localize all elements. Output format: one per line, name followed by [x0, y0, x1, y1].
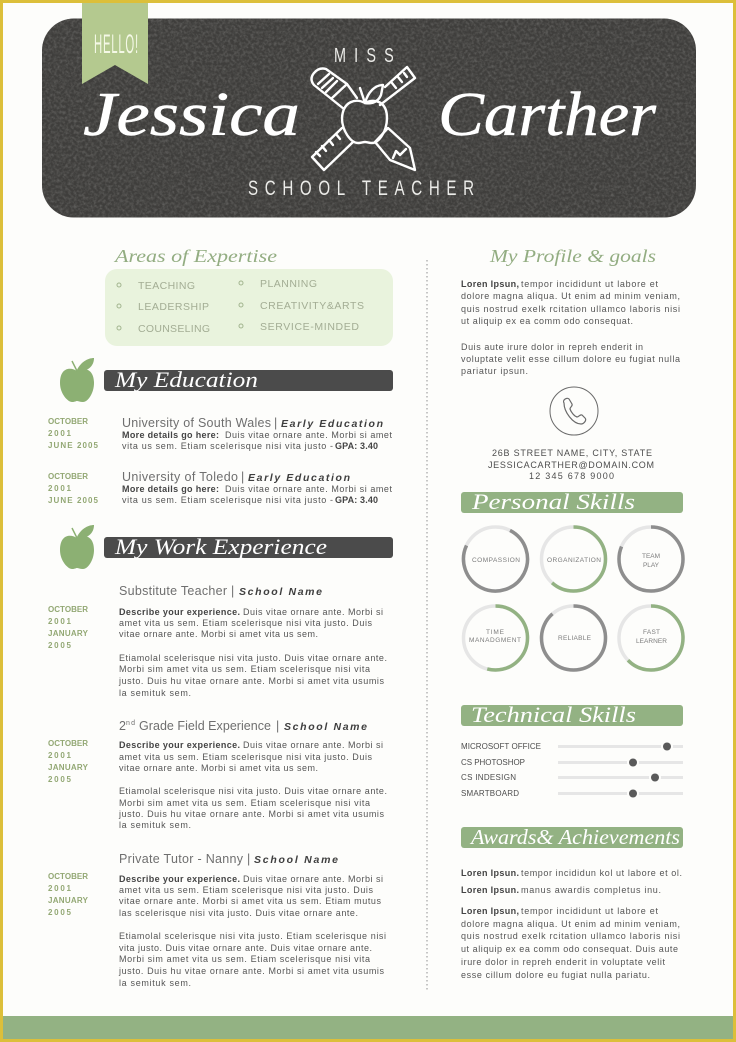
awards text: manus awardis completus inu. — [521, 885, 661, 895]
job 3: Describe your experience. — [119, 874, 240, 884]
contact details: 26B STREET NAME, CITY, STATE — [492, 448, 652, 458]
contact details: JESSICACARTHER@DOMAIN.COM — [488, 460, 654, 470]
heading bar: personal skills: Personal Skills — [471, 489, 635, 514]
skill: cs photoshop: CS PHOTOSHOP — [461, 758, 525, 767]
panel: technical skills — [461, 702, 683, 800]
miss label: MISS — [334, 44, 394, 67]
awards text: quis nostrud exelk rcitation ullamco laboris nisi — [461, 931, 680, 941]
contact details — [488, 448, 654, 481]
awards text: ut aliquip ex ea comm odo consequat. Duis aute — [461, 944, 678, 954]
job 2: justo. Duis hu vitae ornare ante. Morbi si amet vita usumis — [118, 809, 384, 819]
education entry 1: More details go here: — [122, 430, 219, 440]
education entry 2: | — [241, 470, 244, 484]
hello ribbon: HELLO! — [94, 30, 138, 60]
vertical divider — [426, 260, 428, 992]
heading bar: technical skills: Technical Skills — [471, 702, 636, 727]
job 3: 2005 — [48, 908, 72, 917]
job 1: 2005 — [48, 641, 72, 650]
expertise box — [105, 269, 393, 346]
awards text: Loren Ipsun, — [461, 906, 519, 916]
job 1 — [48, 584, 387, 698]
heading: areas of expertise: Areas of Expertise — [114, 246, 277, 266]
ring: fast learner: FAST — [643, 629, 660, 636]
job 3: Duis vitae ornare ante. Morbi si — [243, 874, 383, 884]
job 3: | — [247, 852, 250, 866]
job 1: Morbi sim amet vita us sem. Etiam scelerisque nisi vita — [119, 664, 370, 674]
job 3: OCTOBER — [48, 872, 88, 881]
job 2: 2 — [119, 719, 126, 733]
education entry 2: vita us sem. Etiam scelerisque nisi vita justo - — [122, 495, 333, 505]
job 2: amet vita us sem. Etiam scelerisque nisi vita justo. Duis — [119, 752, 372, 762]
education entry 2: Duis vitae ornare ante. Morbi si amet — [225, 484, 392, 494]
job 2: Etiamolal scelerisque nisi vita justo. Duis vitae ornare ante. — [119, 786, 387, 796]
skill: microsoft office — [461, 740, 683, 752]
job 2: vitae ornare ante. Morbi si amet vita us sem. — [119, 763, 318, 773]
job 2: Morbi sim amet vita us sem. Etiam scelerisque nisi vita — [119, 798, 370, 808]
education entry 2: 2001 — [48, 484, 72, 493]
icon: apple — [60, 525, 94, 569]
expertise list: COUNSELING — [138, 323, 210, 335]
profile text: voluptate velit esse cillum dolore eu fugiat nulla — [461, 354, 680, 364]
job 1: justo. Duis hu vitae ornare ante. Morbi si amet vita usumis — [118, 676, 384, 686]
awards text: tempor incididunt ut labore et — [521, 906, 658, 916]
awards text — [461, 868, 682, 980]
job 1: vitae ornare ante. Morbi si amet vita us sem. — [119, 629, 318, 639]
profile text: dolore magna aliqua. Ut enim ad minim veniam, — [461, 291, 680, 301]
expertise list: PLANNING — [260, 278, 317, 290]
skill: smartboard — [461, 788, 683, 800]
education entry 1: vita us sem. Etiam scelerisque nisi vita justo - — [122, 441, 333, 451]
job 1: School Name — [239, 586, 322, 598]
job 1: 2001 — [48, 617, 72, 626]
ring: fast learner: LEARNER — [636, 638, 667, 645]
heading bar: technical skills — [461, 702, 683, 727]
heading bar: awards and achievements: Awards& Achievements — [469, 825, 680, 849]
profile text: quis nostrud exelk rcitation ullamco laboris nisi — [461, 304, 680, 314]
hello ribbon — [82, 3, 148, 84]
job 2: OCTOBER — [48, 739, 88, 748]
education entry 1: OCTOBER — [48, 417, 88, 426]
education entry 1: University of South Wales — [122, 416, 271, 430]
job 3: JANUARY — [48, 896, 89, 905]
expertise list — [117, 278, 364, 335]
ring: organization — [542, 527, 606, 591]
job title: SCHOOL TEACHER — [248, 175, 474, 200]
awards text: tempor incididun kol ut labore et ol. — [521, 868, 682, 878]
education entry 1: | — [274, 416, 277, 430]
awards text: irure dolor in repreh enderit in voluptate velit — [461, 957, 665, 967]
ring: compassion: COMPASSION — [472, 557, 520, 564]
ring: team play: TEAM — [642, 553, 660, 560]
job 3: School Name — [254, 854, 338, 866]
awards text: esse cillum dolore eu fugiat nulla pariatu. — [461, 970, 650, 980]
ring: time management — [464, 606, 528, 670]
job 2: JANUARY — [48, 763, 89, 772]
icon: phone — [550, 387, 598, 435]
skill: microsoft office: MICROSOFT OFFICE — [461, 742, 541, 751]
profile text: Duis aute irure dolor in repreh enderit in — [461, 342, 643, 352]
job 1: Etiamolal scelerisque nisi vita justo. Duis vitae ornare ante. — [119, 653, 387, 663]
job 1: OCTOBER — [48, 605, 88, 614]
first name: Jessica — [83, 81, 300, 149]
job 1: amet vita us sem. Etiam scelerisque nisi vita justo. Duis — [119, 618, 372, 628]
panel: areas of expertise — [105, 246, 393, 346]
job 2: nd — [126, 720, 135, 727]
panel: personal skills — [452, 489, 683, 670]
job 3: Morbi sim amet vita us sem. Etiam scelerisque nisi vita — [119, 954, 370, 964]
contact details: 12 345 678 9000 — [529, 471, 614, 481]
job 1: | — [231, 584, 234, 598]
profile text — [461, 279, 680, 376]
awards text: Loren Ipsun. — [461, 885, 519, 895]
heading bar: personal skills — [461, 489, 683, 514]
education entry 2: GPA: 3.40 — [335, 495, 378, 505]
panel: education — [48, 358, 393, 505]
profile text: Loren Ipsun, — [461, 279, 519, 289]
ring: time management: MANADGMENT — [469, 637, 521, 644]
profile text: ut aliquip ex ea comm odo consequat. — [461, 316, 633, 326]
job 1: JANUARY — [48, 629, 89, 638]
expertise list: LEADERSHIP — [138, 301, 209, 313]
ring: time management: TIME — [486, 629, 505, 636]
panel: profile — [461, 246, 680, 481]
heading bar: my education: My Education — [114, 367, 258, 392]
heading: my profile and goals: My Profile & goals — [489, 246, 656, 266]
job 3: Etiamolal scelerisque nisi vita justo. Etiam scelerisque nisi — [119, 931, 386, 941]
education entry 1: JUNE 2005 — [48, 441, 99, 450]
education entry 1: Early Education — [281, 418, 383, 430]
job 3: 2001 — [48, 884, 72, 893]
ring: organization: ORGANIZATION — [547, 557, 601, 564]
education entry 1 — [48, 416, 392, 451]
ring: compassion — [452, 516, 539, 602]
icon: apple — [60, 358, 94, 402]
job 2: Duis vitae ornare ante. Morbi si — [243, 740, 383, 750]
panel: work experience — [48, 525, 393, 988]
skill: cs indesign: CS INDESIGN — [461, 773, 516, 782]
job 2: | — [276, 719, 279, 733]
skill: cs photoshop — [461, 756, 683, 768]
ring: team play: PLAY — [643, 562, 660, 569]
job 1: Describe your experience. — [119, 607, 240, 617]
expertise list: CREATIVITY&ARTS — [260, 300, 364, 312]
job 3: la semituk sem. — [119, 978, 191, 988]
job 1: Substitute Teacher — [119, 584, 227, 598]
job 3: justo. Duis hu vitae ornare ante. Morbi si amet vita usumis — [118, 966, 384, 976]
icon: pencil ruler and apple — [312, 67, 415, 170]
skill: cs indesign — [461, 772, 683, 784]
job 3 — [48, 852, 386, 988]
job 2: Describe your experience. — [119, 740, 240, 750]
expertise list: SERVICE-MINDED — [260, 321, 359, 333]
job 2: la semituk sem. — [119, 820, 191, 830]
job 1: Duis vitae ornare ante. Morbi si — [243, 607, 383, 617]
education entry 1: GPA: 3.40 — [335, 441, 378, 451]
profile text: pariatur ipsun. — [461, 366, 528, 376]
job 2: 2001 — [48, 751, 72, 760]
job 2 — [48, 719, 387, 830]
ring: team play — [619, 527, 683, 591]
header chalkboard banner — [42, 18, 696, 218]
heading bar: my work experience: My Work Experience — [114, 534, 327, 559]
awards text: dolore magna aliqua. Ut enim ad minim veniam, — [461, 919, 680, 929]
education entry 2: University of Toledo — [122, 470, 238, 484]
awards text: Loren Ipsun. — [461, 868, 519, 878]
last name: Carther — [438, 81, 657, 149]
job 2: Grade Field Experience — [139, 719, 271, 733]
job 2: School Name — [284, 721, 367, 733]
education entry 2: OCTOBER — [48, 472, 88, 481]
job 3: vitae ornare ante. Morbi si amet vita us sem. Etiam mutus — [119, 896, 381, 906]
education entry 1: Duis vitae ornare ante. Morbi si amet — [225, 430, 392, 440]
education entry 2: More details go here: — [122, 484, 219, 494]
ring: fast learner — [619, 606, 683, 670]
skill: smartboard: SMARTBOARD — [461, 789, 519, 798]
job 3: vita justo. Duis vitae ornare ante. Duis vitae ornare ante. — [119, 943, 372, 953]
profile text: tempor incididunt ut labore et — [521, 279, 658, 289]
job 3: Private Tutor - Nanny — [119, 852, 244, 866]
education entry 2: JUNE 2005 — [48, 496, 99, 505]
job 3: amet vita us sem. Etiam scelerisque nisi vita justo. Duis — [119, 885, 374, 895]
education entry 1: 2001 — [48, 429, 72, 438]
job 1: la semituk sem. — [119, 688, 191, 698]
heading bar: my education — [104, 367, 393, 392]
education entry 2 — [48, 470, 392, 505]
ring: reliable — [542, 606, 606, 670]
heading bar: my work experience — [104, 534, 393, 559]
ring: reliable: RELIABLE — [558, 635, 592, 642]
panel: awards — [461, 825, 683, 980]
education entry 2: Early Education — [248, 472, 350, 484]
expertise list: TEACHING — [138, 280, 195, 292]
job 3: las scelerisque nisi vita justo. Duis vitae ornare ante. — [119, 908, 358, 918]
footer band — [3, 1016, 733, 1039]
job 2: 2005 — [48, 775, 72, 784]
